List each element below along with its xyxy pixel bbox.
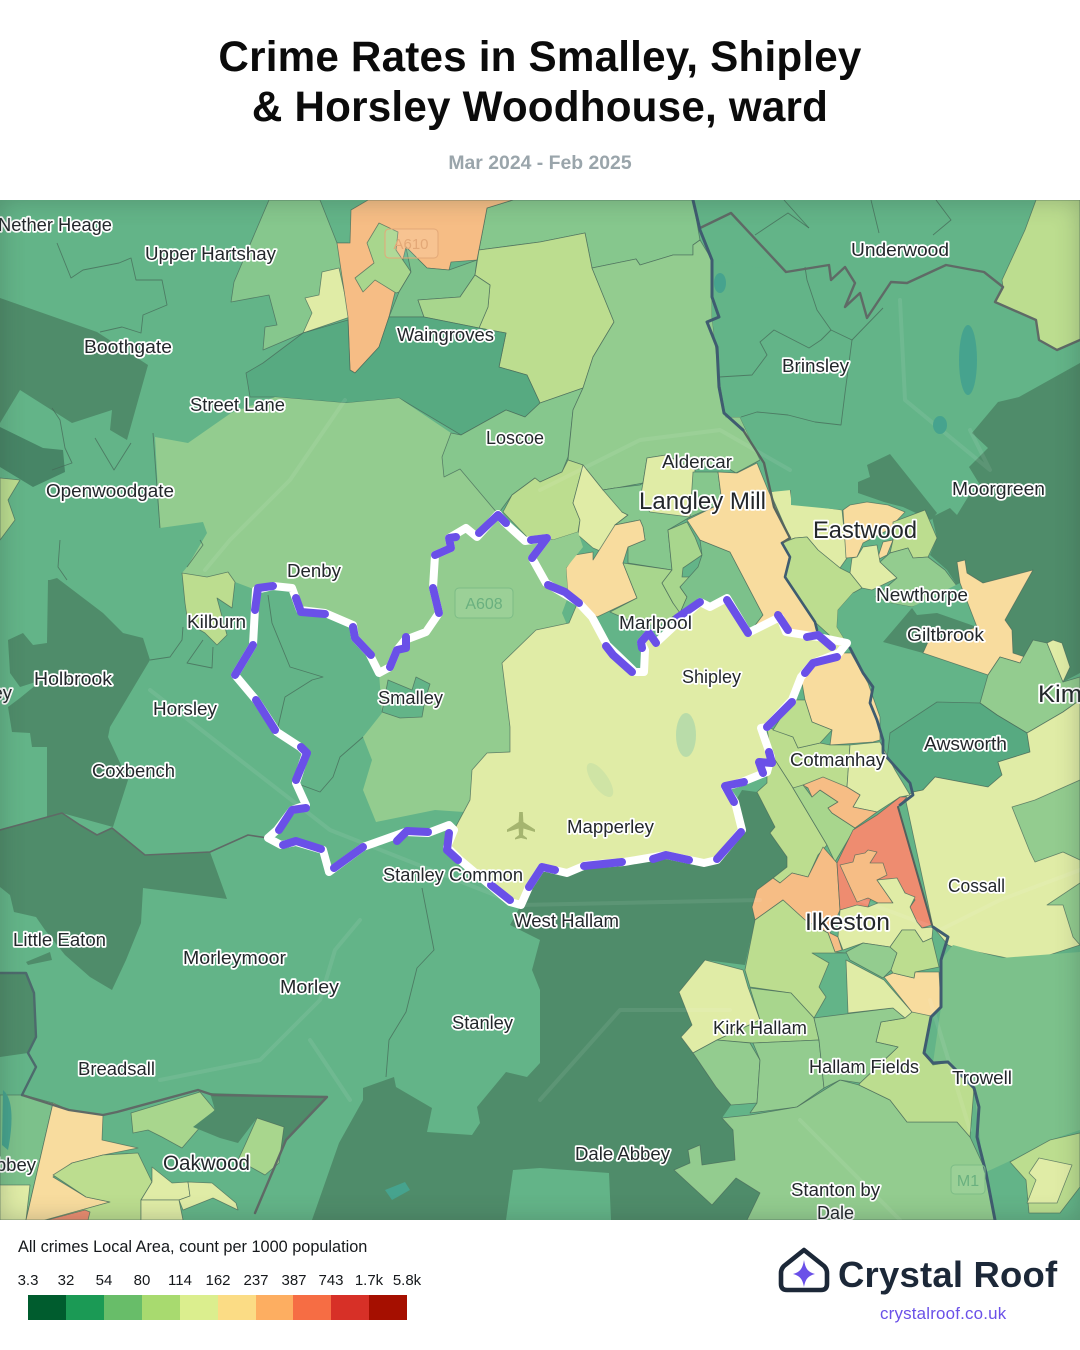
place name labels: Openwoodgate xyxy=(46,480,174,501)
place name labels: Shipley xyxy=(682,666,742,687)
place name labels: Eastwood xyxy=(813,517,917,544)
place name labels: Denby xyxy=(287,560,342,581)
place name labels: Stanley xyxy=(452,1012,514,1033)
legend colour scale: 162 xyxy=(205,1272,231,1289)
place name labels: Newthorpe xyxy=(876,584,968,605)
water bodies xyxy=(2,273,977,1200)
place name labels: Cotmanhay xyxy=(790,749,886,770)
legend colour scale: 32 xyxy=(58,1272,74,1289)
place name labels: Nether Heage xyxy=(0,214,112,235)
place name labels: Morley xyxy=(280,976,340,997)
place name labels: Underwood xyxy=(851,239,949,260)
road shield M1: M1 xyxy=(957,1173,979,1190)
title: Crime Rates in Smalley, Shipley xyxy=(218,33,862,80)
title xyxy=(218,33,862,130)
place name labels: Cossall xyxy=(948,875,1005,896)
place name labels: Upper Hartshay xyxy=(145,243,277,264)
place name labels: Coxbench xyxy=(92,760,175,781)
district and county boundaries xyxy=(0,200,1080,1220)
icon: airport plane xyxy=(507,812,535,840)
legend title: All crimes Local Area, count per 1000 population xyxy=(18,1238,367,1256)
legend colour scale: 3.3 xyxy=(18,1272,38,1289)
road shield M1 xyxy=(951,1165,985,1194)
place name labels: Langley Mill xyxy=(639,488,766,515)
place name labels: Loscoe xyxy=(486,427,544,448)
logo wordmark: Crystal Roof xyxy=(838,1254,1057,1295)
place name labels: Moorgreen xyxy=(952,478,1045,499)
place name labels: Little Eaton xyxy=(13,929,106,950)
place name labels: Kirk Hallam xyxy=(713,1017,807,1038)
place name labels: Stanton by xyxy=(791,1179,881,1200)
legend colour scale: 743 xyxy=(318,1272,344,1289)
title: & Horsley Woodhouse, ward xyxy=(252,83,828,130)
place name labels: Horsley xyxy=(153,698,218,719)
place name labels: Trowell xyxy=(952,1067,1012,1088)
road shield A610 xyxy=(385,229,438,258)
road shield A608: A608 xyxy=(465,596,503,613)
legend colour scale: 237 xyxy=(243,1272,269,1289)
place name labels: Stanley Common xyxy=(383,864,523,885)
legend colour scale: 114 xyxy=(168,1272,192,1289)
icon: Crystal Roof house logo xyxy=(778,1248,830,1292)
place name labels: Mapperley xyxy=(567,816,655,837)
place name labels: Brinsley xyxy=(782,355,850,376)
map edge vignette overlay xyxy=(0,200,1080,1220)
legend colour scale: 1.7k xyxy=(355,1272,383,1289)
legend colour scale: 54 xyxy=(96,1272,112,1289)
website url: crystalroof.co.uk xyxy=(880,1304,1006,1323)
place name labels: Ilkeston xyxy=(805,909,890,936)
place name labels: Oakwood xyxy=(163,1152,250,1175)
place name labels: Waingroves xyxy=(397,324,494,345)
place name labels: West Hallam xyxy=(514,910,619,931)
place name labels: Giltbrook xyxy=(907,624,985,645)
place name labels: Aldercar xyxy=(662,451,732,472)
faint road network xyxy=(150,300,1080,1220)
place name labels: Marlpool xyxy=(619,612,692,633)
place name labels: Morleymoor xyxy=(183,947,286,968)
place name labels: Holbrook xyxy=(34,668,113,689)
legend colour scale: 5.8k xyxy=(393,1272,421,1289)
place name labels: Awsworth xyxy=(924,733,1007,754)
place name labels: Boothgate xyxy=(84,336,172,357)
place name labels: Kim xyxy=(1038,681,1080,708)
place name labels: Dale Abbey xyxy=(575,1143,671,1164)
legend colour scale xyxy=(18,1272,422,1320)
legend colour scale: 80 xyxy=(134,1272,150,1289)
place name labels: Hallam Fields xyxy=(809,1056,919,1077)
road shield A610: A610 xyxy=(393,236,429,253)
place name labels xyxy=(0,214,1080,1223)
thin ward and parish lines xyxy=(52,200,951,1077)
ward boundary, white and purple dashed xyxy=(235,514,847,905)
place name labels: Breadsall xyxy=(78,1058,155,1079)
choropleth regions xyxy=(0,200,1080,1220)
place name labels: Kilburn xyxy=(187,611,246,632)
road shield A608 xyxy=(455,588,513,618)
date range subtitle: Mar 2024 - Feb 2025 xyxy=(448,152,632,174)
legend colour scale: 387 xyxy=(281,1272,307,1289)
choropleth map panel xyxy=(0,200,1080,1220)
place name labels: Street Lane xyxy=(190,394,285,415)
place name labels: Smalley xyxy=(378,687,444,708)
